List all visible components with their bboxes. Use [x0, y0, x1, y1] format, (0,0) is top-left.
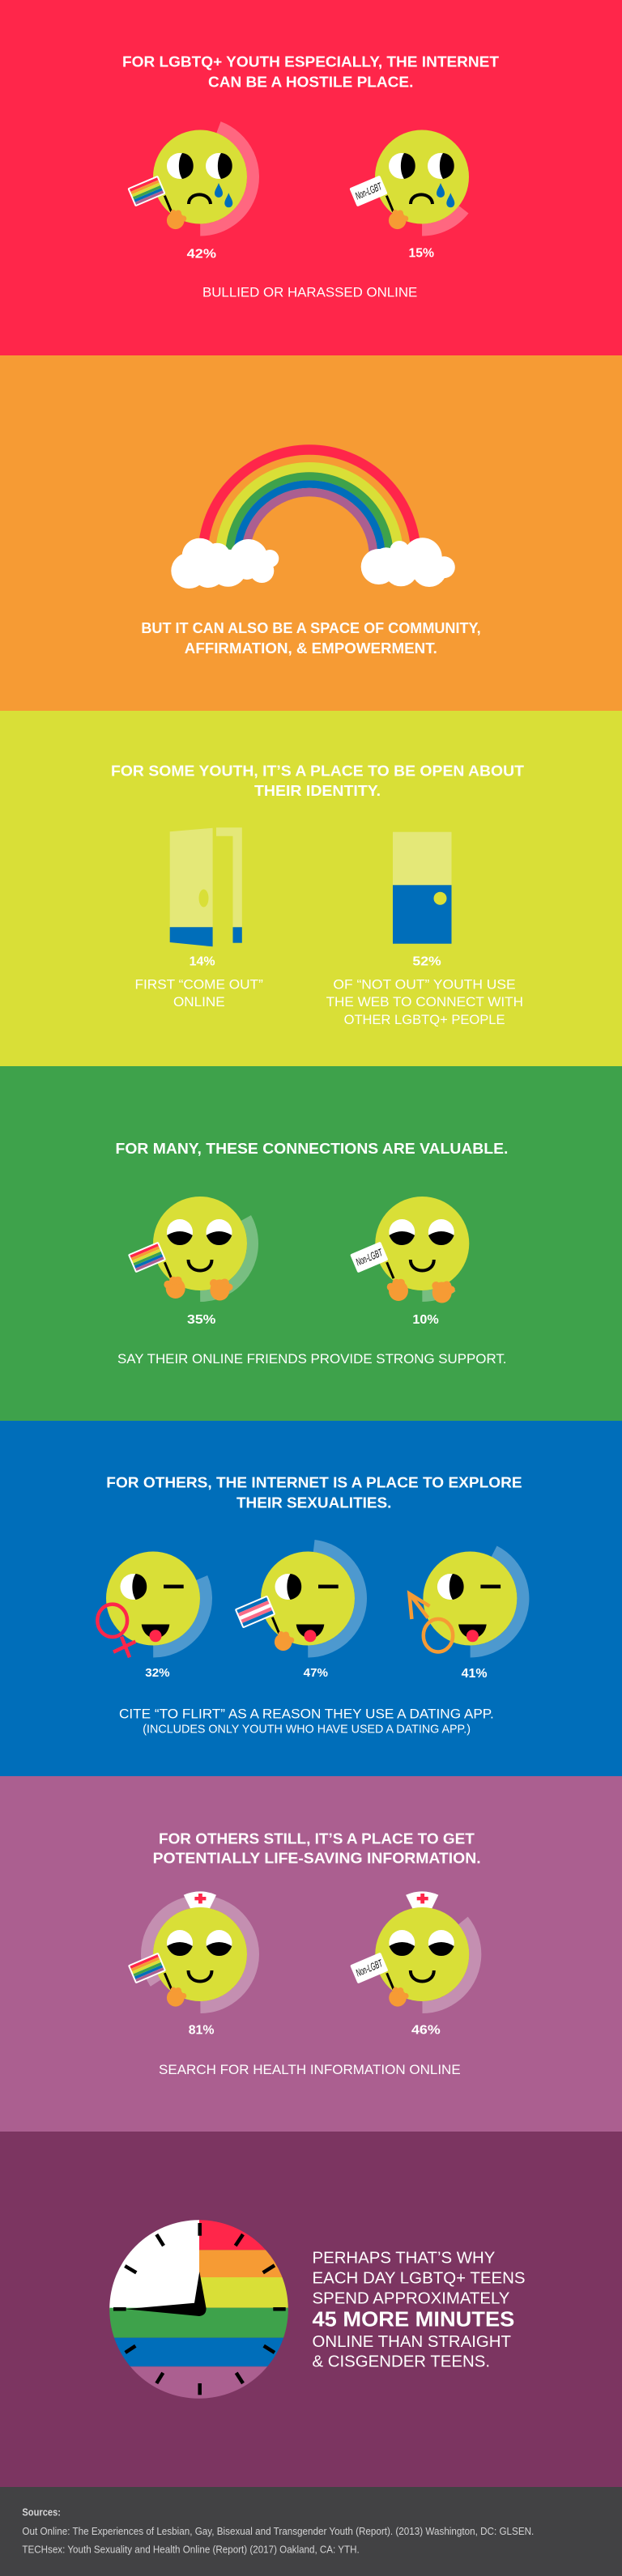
panel: valuable connections: [0, 1066, 622, 1421]
icon: crying face with non-LGBT sign: Non-LGBT: [353, 180, 384, 202]
heading: explore sexualities: [106, 1474, 522, 1511]
heading: valuable connections: FOR MANY, THESE CONNECTIONS ARE VALUABLE.: [115, 1141, 508, 1157]
text: 45 more minutes: [313, 2249, 525, 2370]
label: online friends support: SAY THEIR ONLINE FRIENDS PROVIDE STRONG SUPPORT.: [117, 1352, 507, 1367]
icon: nurse face with non-LGBT sign: [347, 1880, 496, 2029]
icon: left cloud: [171, 538, 279, 589]
heading: identity: THEIR IDENTITY.: [254, 783, 381, 799]
heading: health information: POTENTIALLY LIFE-SAVING INFORMATION.: [153, 1851, 481, 1867]
label: not out youth: OF “NOT OUT” YOUTH USE: [333, 977, 516, 992]
panel: 45 more minutes: [0, 2132, 622, 2487]
stat: 47%: 47%: [304, 1666, 328, 1680]
icon: winking face with female symbol: [83, 1529, 223, 1668]
chart: rainbow clock: [105, 2218, 292, 2400]
stat: 46%: 46%: [411, 2023, 441, 2037]
label: not out youth: THE WEB TO CONNECT WITH: [326, 995, 523, 1010]
panel: identity: [0, 711, 622, 1066]
heading: community: AFFIRMATION, & EMPOWERMENT.: [185, 640, 437, 657]
icon: nurse face with rainbow flag: [126, 1881, 274, 2028]
panel: sources: [0, 2487, 622, 2576]
text: source 1: Out Online: The Experiences of Lesbian, Gay, Bisexual and Transgender Youth (Report). (2013) Washington, DC: GLSEN.: [22, 2526, 534, 2537]
icon: closed door 52%: [393, 832, 452, 944]
label: come out online: ONLINE: [173, 995, 225, 1010]
icon: open door 14%: [170, 827, 242, 946]
icon: rainbow: [202, 450, 416, 556]
text: 45 more minutes: EACH DAY LGBTQ+ TEENS: [313, 2269, 525, 2287]
heading: community: BUT IT CAN ALSO BE A SPACE OF COMMUNITY,: [141, 620, 481, 636]
heading: health information: FOR OTHERS STILL, IT’S A PLACE TO GET: [159, 1830, 475, 1847]
panel: hostile place: [0, 0, 622, 355]
text: 45 more minutes: 45 MORE MINUTES: [313, 2308, 514, 2331]
stat: 42%: 42%: [187, 247, 216, 261]
stat: 35%: 35%: [187, 1313, 215, 1327]
heading: hostile place: CAN BE A HOSTILE PLACE.: [208, 74, 413, 90]
label: bullied: BULLIED OR HARASSED ONLINE: [202, 286, 417, 300]
icon: happy face with non-LGBT sign: [349, 1170, 496, 1317]
heading: health information: [153, 1830, 481, 1867]
heading: identity: FOR SOME YOUTH, IT’S A PLACE TO BE OPEN ABOUT: [111, 763, 524, 779]
heading: hostile place: FOR LGBTQ+ YOUTH ESPECIALLY, THE INTERNET: [122, 54, 499, 70]
text: sources heading: Sources:: [22, 2507, 61, 2519]
label: to flirt: (INCLUDES ONLY YOUTH WHO HAVE USED A DATING APP.): [143, 1724, 471, 1736]
stat: 81%: 81%: [189, 2023, 214, 2037]
panel: health information: [0, 1776, 622, 2132]
icon: crying face with non-LGBT sign: [347, 103, 496, 251]
icon: happy face with rainbow flag: [128, 1172, 271, 1315]
label: not out youth: OTHER LGBTQ+ PEOPLE: [344, 1013, 505, 1027]
panel: explore sexualities: [0, 1421, 622, 1776]
label: health search: SEARCH FOR HEALTH INFORMATION ONLINE: [159, 2063, 461, 2077]
stat: 10%: 10%: [412, 1313, 439, 1327]
stat: 52%: 52%: [412, 955, 441, 969]
text: 45 more minutes: & CISGENDER TEENS.: [313, 2353, 490, 2370]
stat: 14%: 14%: [190, 955, 215, 969]
label: to flirt: [119, 1707, 494, 1736]
icon: crying face with rainbow flag: [127, 108, 268, 245]
heading: explore sexualities: FOR OTHERS, THE INTERNET IS A PLACE TO EXPLORE: [106, 1474, 522, 1490]
text: 45 more minutes: PERHAPS THAT’S WHY: [313, 2249, 495, 2267]
panel: community: [0, 355, 622, 711]
icon: nurse face with non-LGBT sign: Non-LGBT: [354, 1957, 385, 1979]
label: come out online: FIRST “COME OUT”: [134, 977, 263, 992]
stat: 41%: 41%: [462, 1667, 488, 1681]
heading: explore sexualities: THEIR SEXUALITIES.: [236, 1494, 391, 1511]
stat: 32%: 32%: [145, 1666, 170, 1680]
heading: identity: [111, 763, 524, 799]
icon: winking face with trans flag: [235, 1540, 367, 1657]
text: 45 more minutes: SPEND APPROXIMATELY: [313, 2289, 509, 2307]
icon: right cloud: [361, 538, 455, 587]
label: come out online: [134, 977, 263, 1010]
label: to flirt: CITE “TO FLIRT” AS A REASON THEY USE A DATING APP.: [119, 1707, 494, 1721]
label: not out youth: [326, 977, 523, 1027]
text: source 2: TECHsex: Youth Sexuality and Health Online (Report) (2017) Oakland, CA: YTH.: [22, 2544, 360, 2556]
heading: hostile place: [122, 54, 499, 90]
heading: community: [141, 620, 481, 657]
text: 45 more minutes: ONLINE THAN STRAIGHT: [313, 2333, 511, 2351]
icon: happy face with non-LGBT sign: Non-LGBT: [354, 1246, 385, 1269]
stat: 15%: 15%: [408, 247, 434, 261]
icon: winking face with male symbol: [398, 1527, 541, 1670]
